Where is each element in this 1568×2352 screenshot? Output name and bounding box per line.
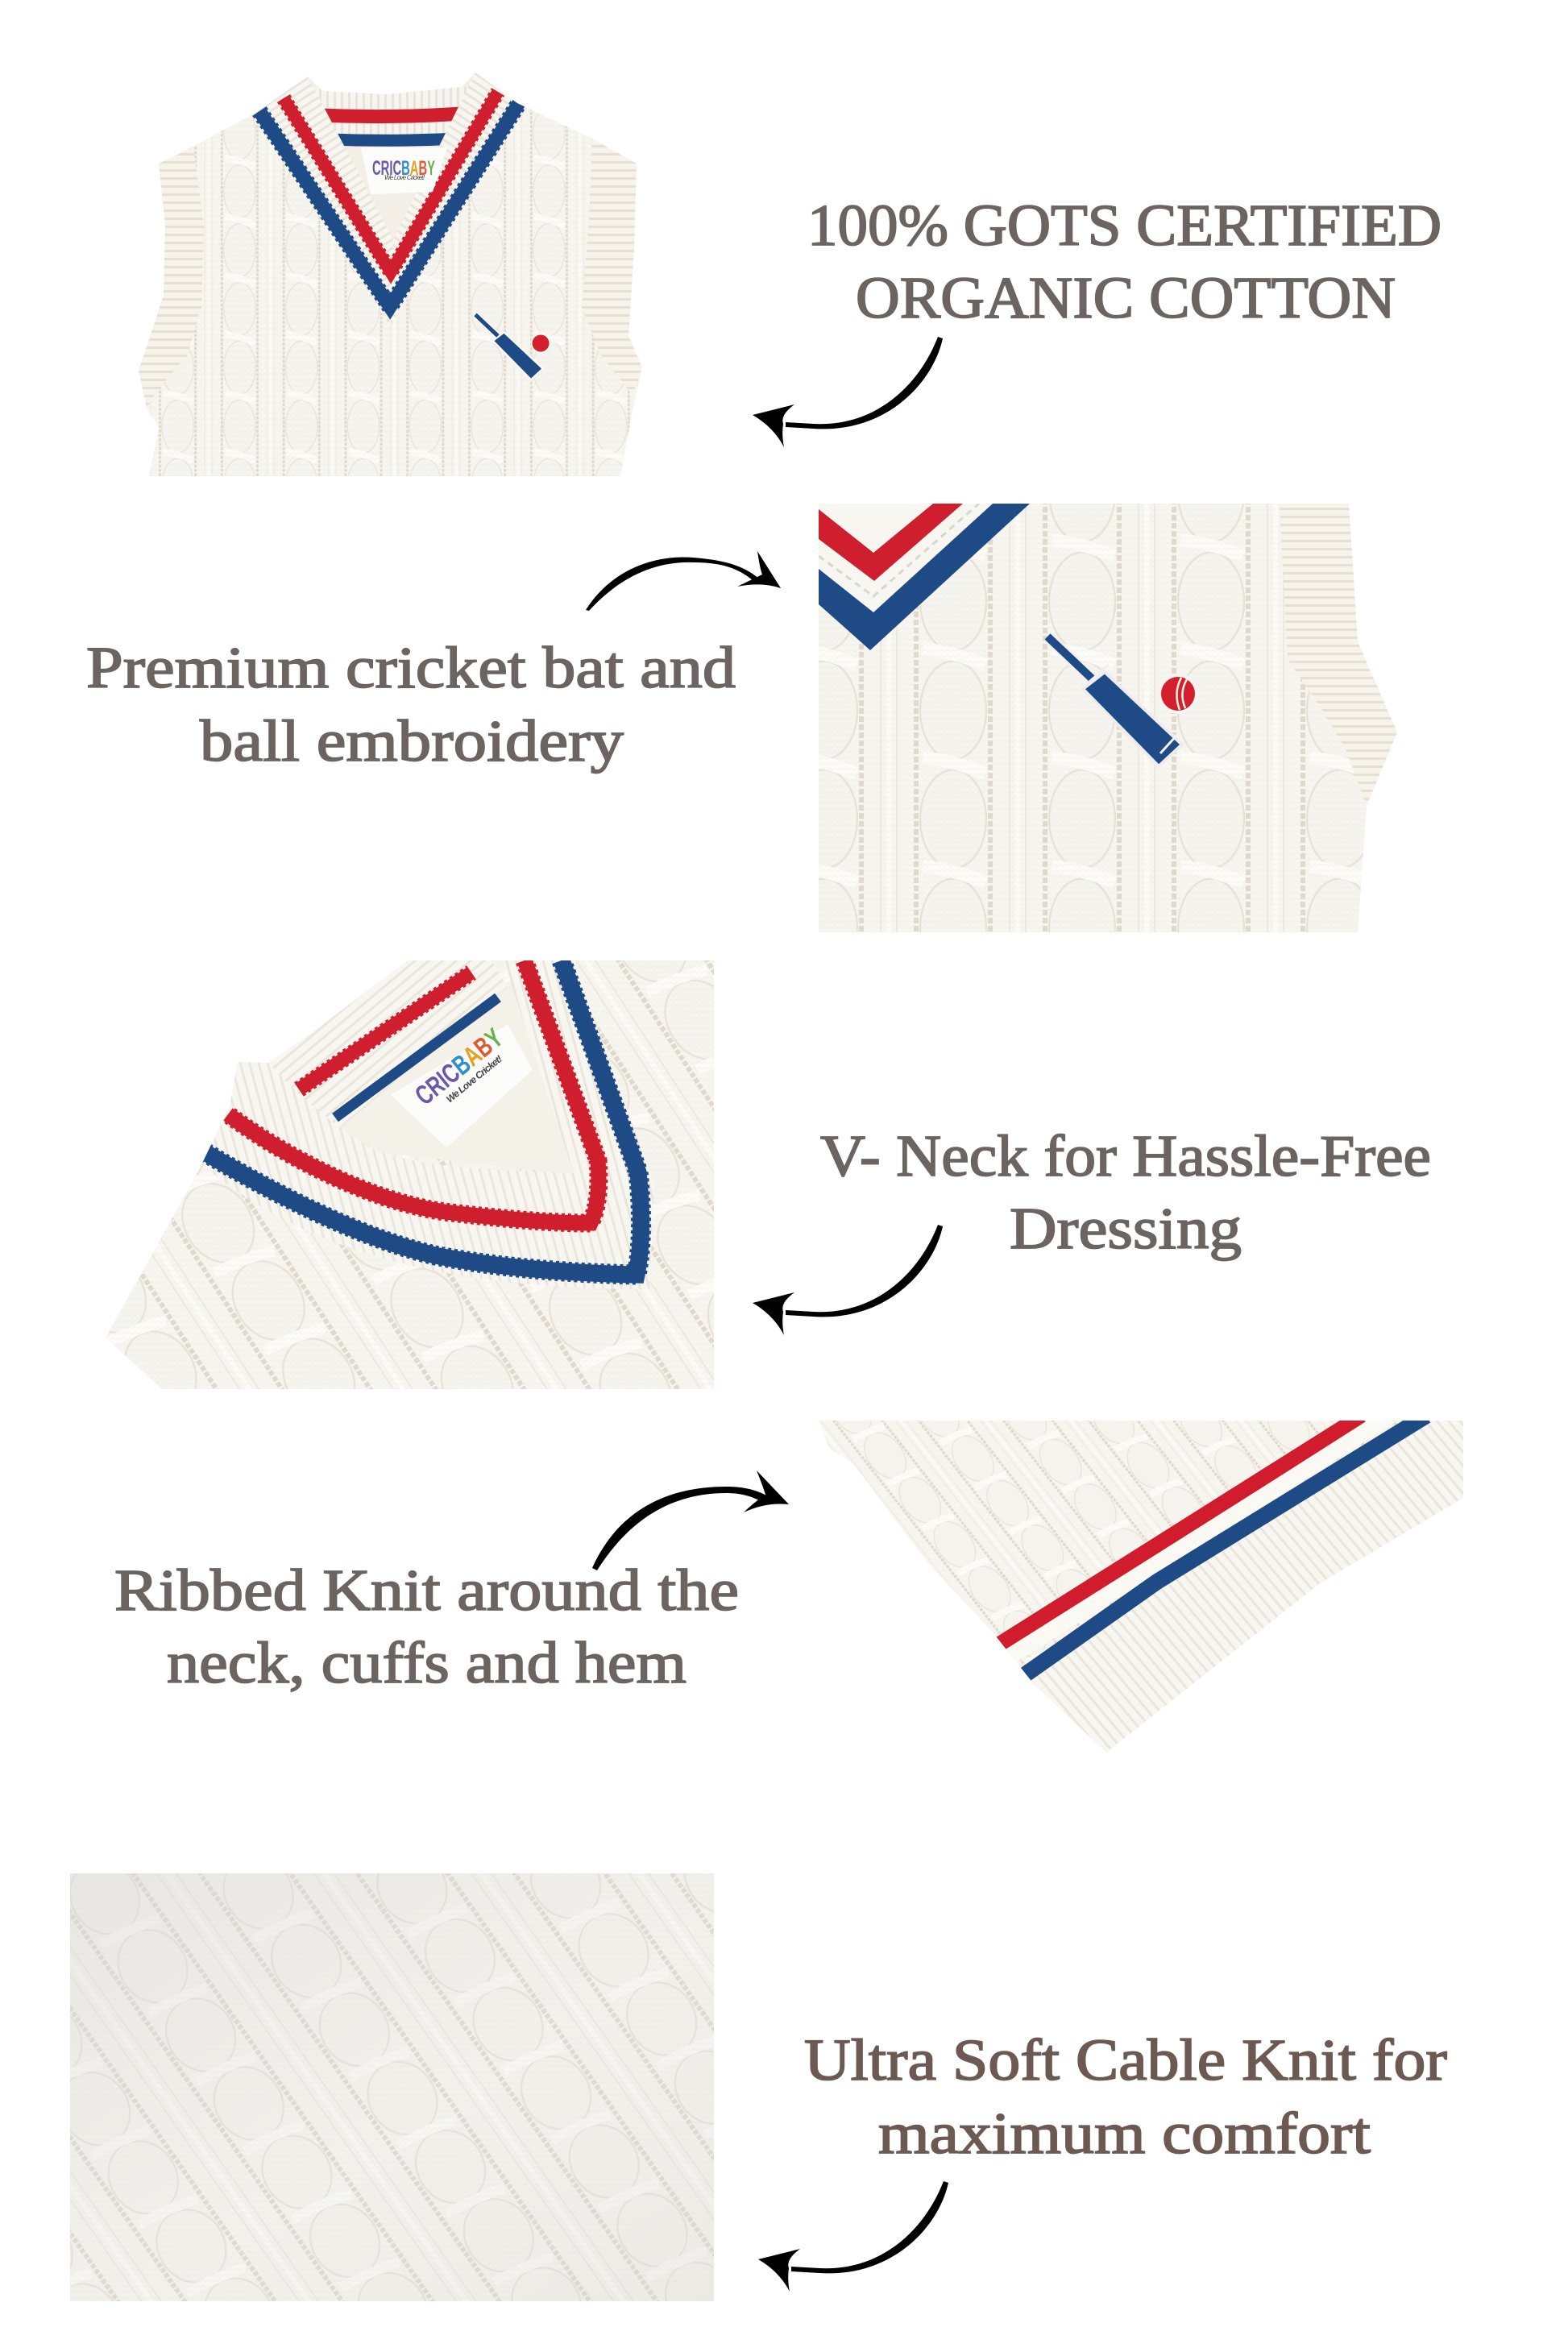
arrow: ribbed knit [592,1471,789,1570]
icon: small bat and ball embroidery [475,314,551,380]
text: bat embroidery: ball embroidery [200,708,624,774]
text: v-neck: V- Neck for Hassle-Free [820,1123,1431,1188]
panel: v-neck close-up [97,955,725,1398]
panel: embroidery close-up [819,500,1407,939]
arrow: organic cotton to vest [753,337,943,447]
neck label angled: CRICBABY [409,1023,509,1111]
neck label angled: We Love Cricket! [444,1053,504,1105]
text: v-neck [820,1123,1431,1261]
text: cable knit [804,2027,1447,2166]
arrow: v-neck [753,1225,943,1335]
text: cable knit: Ultra Soft Cable Knit for [804,2027,1447,2093]
panel: ribbed hem close-up [814,1414,1475,1757]
neck label angled [391,1023,533,1147]
neck label: We Love Cricket! [384,174,425,181]
text: bat embroidery [86,635,736,774]
neck label [361,147,447,194]
panel: cable knit close-up [70,1873,714,2301]
text: v-neck: Dressing [1010,1196,1242,1261]
neck label: CRICBABY [372,157,435,180]
arrow: cable knit [758,2181,948,2292]
text: bat embroidery: Premium cricket bat and [86,635,736,700]
icon: large bat and ball embroidery [1047,637,1198,766]
text: ribbed knit: Ribbed Knit around the [114,1558,739,1623]
heading: organic cotton: 100% GOTS CERTIFIED [807,193,1441,258]
arrow: embroidery [586,551,781,611]
text: ribbed knit: neck, cuffs and hem [167,1630,687,1695]
text: cable knit: maximum comfort [878,2101,1371,2166]
text: ribbed knit [114,1558,739,1695]
heading: organic cotton: ORGANIC COTTON [856,265,1396,330]
panel: full vest photo [129,64,653,483]
heading: organic cotton [807,193,1441,330]
